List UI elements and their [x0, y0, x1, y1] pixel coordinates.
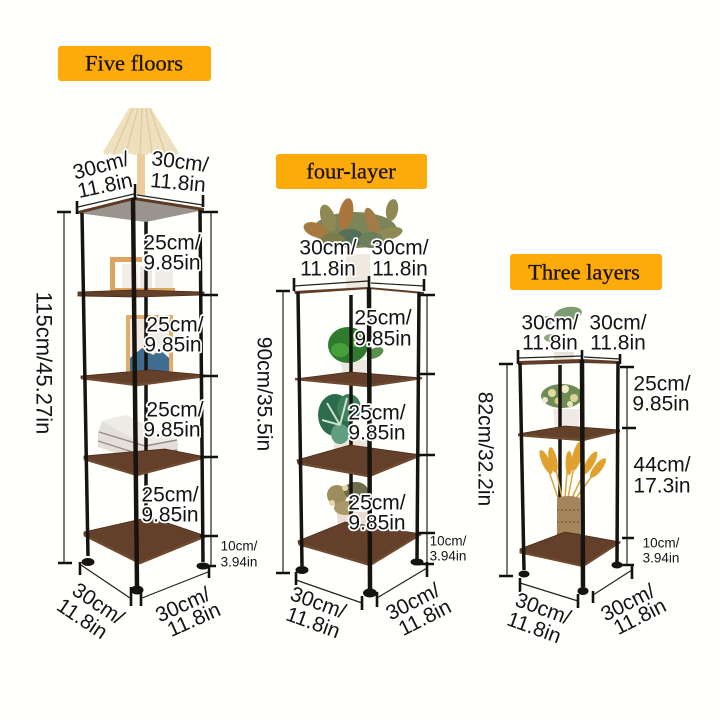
labels: 25cm/	[348, 492, 406, 514]
labels: 11.8in	[75, 169, 135, 203]
top shelf	[518, 359, 620, 365]
labels: 9.85in	[354, 328, 412, 350]
icon: woven basket vase	[557, 496, 580, 552]
labels	[32, 147, 258, 644]
five floor shelf	[32, 108, 258, 644]
labels: 30cm/	[512, 588, 574, 630]
icon: top leafy plant	[301, 197, 404, 288]
labels: 11.8in	[590, 332, 646, 354]
poles	[82, 198, 209, 594]
labels: 25cm/	[146, 398, 204, 422]
labels: 11.8in	[283, 603, 343, 643]
top shelf	[294, 287, 424, 294]
labels: 9.85in	[348, 422, 406, 444]
banner: Three layers: Three layers	[528, 260, 640, 284]
labels: 10cm/	[643, 536, 680, 550]
shelf 3	[297, 445, 421, 477]
labels	[252, 236, 467, 643]
icon: top plant	[540, 305, 583, 362]
labels: 30cm/	[70, 147, 132, 185]
dimension lines	[276, 276, 435, 610]
shelf 2	[78, 290, 204, 297]
labels: 25cm/	[146, 314, 204, 336]
labels: 25cm/	[348, 402, 406, 424]
labels: 11.8in	[372, 258, 428, 280]
banner: Five floors	[58, 46, 211, 81]
labels: 10cm/	[430, 534, 467, 548]
banner: Three layers	[510, 254, 662, 290]
labels: 90cm/35.5in	[252, 337, 276, 451]
icon: dried flowers and pot	[327, 482, 368, 542]
icon: pleated lamp	[103, 108, 179, 196]
labels: 30cm/	[287, 582, 349, 624]
labels: 10cm/	[221, 538, 258, 554]
labels: 9.85in	[632, 392, 690, 416]
labels: 11.8in	[610, 594, 670, 640]
icon: green plant and pot	[328, 327, 385, 381]
labels: 9.85in	[143, 252, 201, 274]
labels: 11.8in	[522, 332, 578, 354]
poles	[296, 288, 423, 597]
shelf 4	[298, 522, 421, 565]
icon: dried wheat stalks	[537, 440, 609, 498]
labels: 9.85in	[143, 418, 201, 442]
back pole	[349, 295, 353, 525]
labels: 30cm/	[382, 579, 444, 625]
labels: 25cm/	[354, 306, 412, 330]
banner: Five floors: Five floors	[85, 50, 183, 76]
dimension lines	[499, 350, 636, 608]
dimension lines	[57, 184, 218, 606]
labels: 11.8in	[504, 608, 564, 648]
labels: 25cm/	[141, 484, 199, 506]
labels	[474, 312, 691, 648]
top shelf	[78, 197, 204, 222]
labels: 3.94in	[430, 548, 466, 564]
four-layer shelf	[252, 197, 467, 643]
labels: 30cm/	[521, 312, 579, 334]
labels: 9.85in	[144, 334, 202, 356]
labels: 11.8in	[300, 258, 356, 280]
shelf 3	[520, 532, 620, 566]
labels: 115cm/45.27in	[32, 292, 56, 434]
shelf 2	[295, 372, 422, 386]
labels: 9.85in	[348, 512, 406, 534]
icon: flowering plant and pot	[541, 384, 583, 432]
labels: 11.8in	[164, 598, 224, 642]
icon: variegated plant and pot	[318, 394, 368, 460]
labels: 30cm/	[371, 236, 429, 260]
labels: 11.8in	[52, 594, 112, 644]
poles	[519, 360, 622, 594]
icon: picture frame	[126, 315, 173, 375]
three-layer shelf	[474, 305, 691, 648]
banner: four-layer: four-layer	[306, 158, 396, 184]
labels: 9.85in	[141, 504, 199, 526]
labels: 30cm/	[150, 147, 210, 177]
labels: 25cm/	[633, 372, 691, 396]
labels: 25cm/	[143, 232, 201, 254]
labels: 17.3in	[633, 474, 691, 498]
labels: 11.8in	[149, 169, 207, 197]
icon: stacked books	[98, 415, 178, 463]
labels: 30cm/	[68, 578, 128, 630]
banner: four-layer	[276, 154, 427, 189]
labels: 30cm/	[299, 236, 357, 260]
back pole	[558, 365, 562, 535]
shelf 5	[84, 517, 206, 563]
labels: 30cm/	[597, 580, 659, 626]
labels: 3.94in	[643, 550, 679, 566]
shelf 3	[81, 370, 205, 385]
labels: 30cm/	[589, 312, 647, 334]
icon: calendar	[110, 257, 175, 293]
labels: 11.8in	[395, 595, 455, 641]
back pole	[144, 202, 148, 520]
labels: 3.94in	[221, 554, 257, 570]
shelf 4	[84, 449, 206, 475]
labels: 82cm/32.2in	[474, 392, 496, 506]
labels: 44cm/	[633, 454, 691, 476]
labels: 30cm/	[152, 583, 214, 627]
shelf 2	[518, 426, 620, 440]
